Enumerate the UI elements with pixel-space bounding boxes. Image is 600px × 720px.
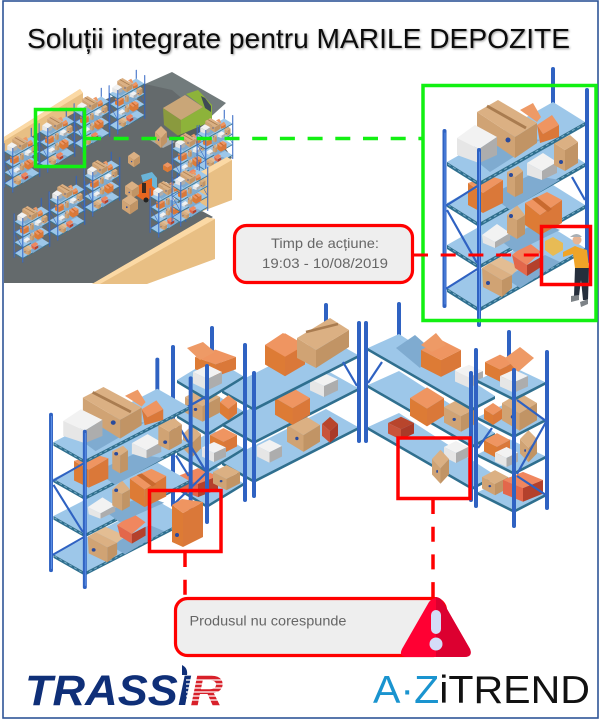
mini racks right row <box>172 110 233 189</box>
rack unit 5 <box>476 332 547 526</box>
green dashed connector <box>86 137 422 140</box>
callout text: Produsul nu corespunde <box>190 612 347 628</box>
rack unit 3 <box>222 305 359 496</box>
delivery truck <box>163 90 212 136</box>
red highlight left product <box>150 490 221 552</box>
callout text: label: Timp de acțiune: <box>271 235 379 251</box>
stacked boxes by truck <box>155 126 167 148</box>
title: Soluții integrate pentru MARILE DEPOZITE <box>27 23 570 54</box>
logo: A-Z iTREND: A·ZiTREND <box>373 669 590 712</box>
loading dock ramp <box>145 72 226 116</box>
callout: product mismatch <box>176 598 446 656</box>
mini racks corner row <box>150 162 208 237</box>
callout: action time <box>234 226 412 282</box>
pallet of boxes <box>122 181 139 214</box>
warehouse floor <box>4 84 232 283</box>
logo: TRASSIR: TRASSIR <box>25 667 223 715</box>
rack unit 2 <box>173 328 245 522</box>
icon: warning triangle <box>401 597 471 657</box>
warehouse isometric overview <box>4 70 233 284</box>
red dashed connector left <box>183 552 187 598</box>
warehouse front wall <box>92 217 215 284</box>
warehouse worker with box <box>545 234 589 307</box>
rack unit 1 <box>51 359 191 587</box>
mini racks front row <box>14 152 120 262</box>
large rack group <box>51 304 547 587</box>
green highlight on overview <box>36 110 84 166</box>
floor loading mark <box>150 135 175 148</box>
warehouse corner wall <box>163 157 232 212</box>
loose boxes on floor <box>128 152 172 190</box>
red dashed connector to worker <box>413 254 541 256</box>
red dashed connector right <box>431 499 435 598</box>
green highlight on enlarged rack <box>423 86 596 320</box>
selected rack enlarged <box>444 69 587 325</box>
forklift <box>137 172 158 202</box>
red highlight right product <box>398 438 470 498</box>
warehouse back wall <box>4 89 83 152</box>
red highlight on worker <box>542 226 590 284</box>
callout text: timestamp: 19:03 - 10/08/2019 <box>262 255 388 271</box>
mini racks back row <box>4 70 145 192</box>
wrong orange box <box>172 499 203 547</box>
rack unit 4 <box>366 304 495 500</box>
